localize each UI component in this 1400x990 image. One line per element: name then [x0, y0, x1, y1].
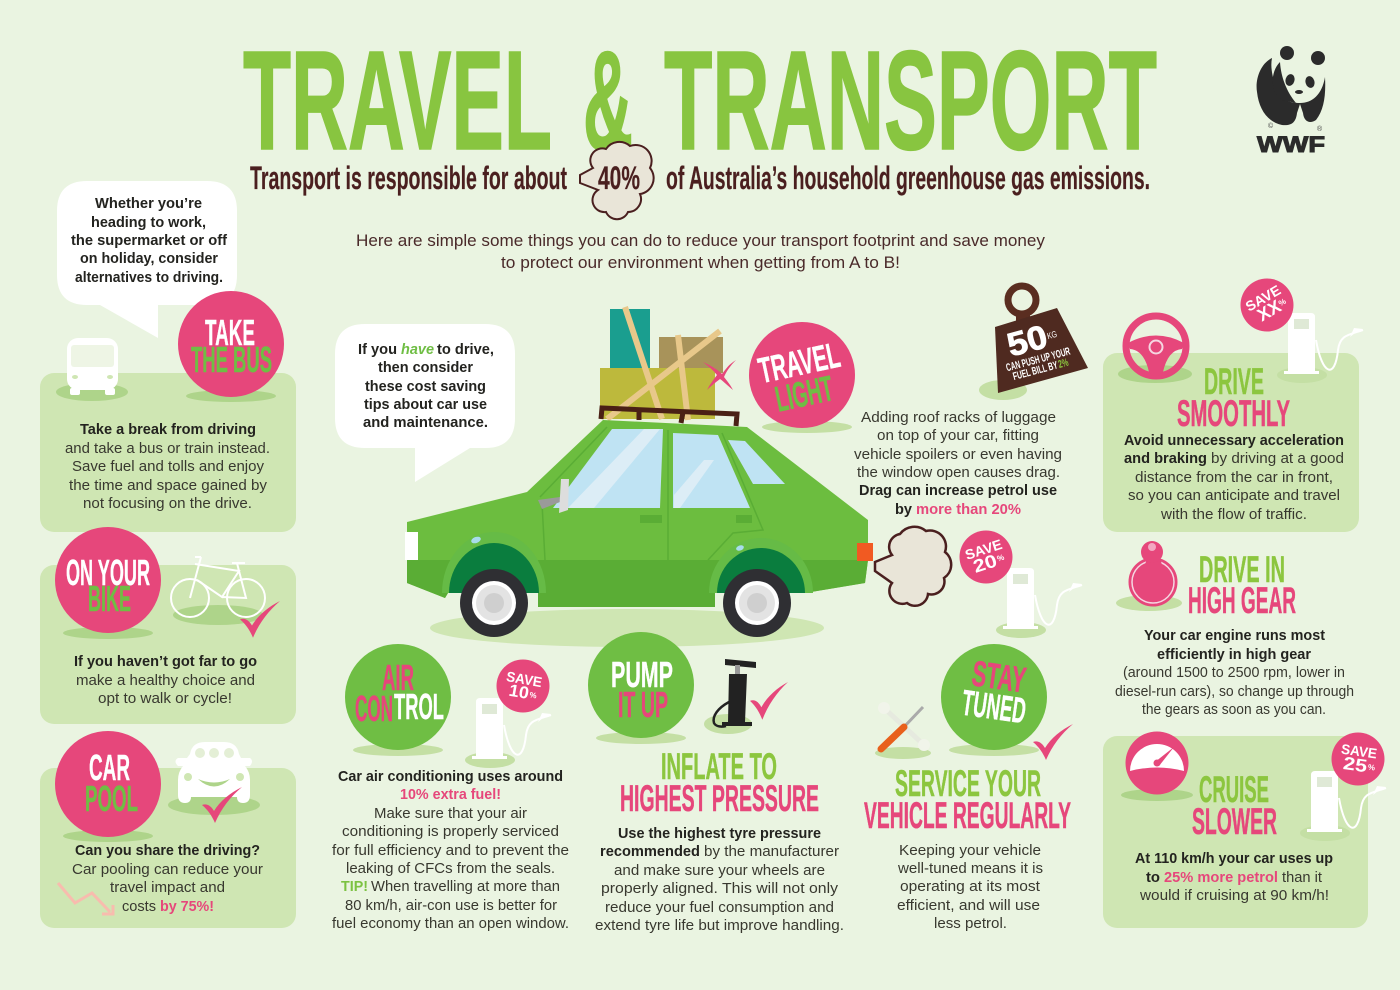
intro text: to protect our environment when getting from A to B! — [501, 254, 900, 272]
text: walk or cycle — [74, 653, 257, 707]
speech bubble: alternatives to driving: Whether you’re — [95, 195, 202, 212]
panel: cruise slower — [1103, 732, 1386, 928]
text: well-tuned vehicle — [897, 842, 1043, 932]
speech bubble: cost saving tips: to drive, — [437, 341, 494, 358]
icon: downward trend arrow — [58, 883, 113, 914]
text: share the driving: costs — [122, 898, 156, 915]
heading: inflate to highest pressure: INFLATE TO — [661, 746, 777, 787]
title: TRAVEL — [243, 21, 552, 179]
text: share the driving: Can you share the driving? — [75, 842, 260, 859]
heading: service your vehicle regularly — [864, 763, 1071, 836]
text: well-tuned vehicle: operating at its most — [900, 878, 1041, 895]
speech bubble: alternatives to driving: the supermarket or off — [71, 232, 228, 249]
icon: checkmark — [750, 682, 788, 720]
badge: on your bike — [55, 527, 161, 639]
icon: fuel pump save 20 percent: % — [996, 553, 1005, 563]
text: well-tuned vehicle: well-tuned means it is — [897, 860, 1043, 877]
text: take a break: Save fuel and tolls and enjoy — [72, 458, 264, 475]
icon: fuel pump save xx percent — [1240, 278, 1363, 383]
car body — [405, 420, 873, 607]
icon: fuel pump save 10 percent: % — [529, 690, 537, 700]
badge: take the bus: TAKE — [205, 312, 255, 353]
icon: 50 kg weight — [979, 286, 1088, 400]
icon: bus — [56, 338, 128, 401]
text: air conditioning: leaking of CFCs from the seals. — [346, 860, 555, 877]
heading: drive smoothly — [1177, 361, 1290, 434]
text: take a break: not focusing on the drive. — [83, 495, 252, 512]
text: 110 km/h: to — [1146, 869, 1160, 886]
icon: fuel pump save 25 percent: SAVE — [1340, 741, 1378, 762]
speech bubble: cost saving tips — [335, 324, 515, 482]
heading: drive in high gear: DRIVE IN — [1199, 549, 1285, 590]
icon: gear knob — [1116, 541, 1182, 611]
text: air conditioning: 10% extra fuel! — [400, 786, 501, 803]
intro text: Here are simple some things you can do to reduce your transport footprint and save money — [356, 232, 1046, 250]
text: avoid acceleration: and braking — [1124, 450, 1207, 467]
text: roof racks and drag: the window open causes drag. — [857, 464, 1060, 481]
text: 110 km/h: 25% more petrol — [1164, 869, 1278, 886]
badge: stay tuned: TUNED — [960, 682, 1029, 731]
text: share the driving: Car pooling can reduce your — [72, 861, 263, 878]
heading: inflate to highest pressure — [620, 746, 819, 819]
text: engine efficiency — [1115, 627, 1354, 718]
badge: pump it up: IT UP — [618, 684, 668, 725]
text: tyre pressure: properly aligned. This will not only — [601, 880, 839, 897]
speech bubble: cost saving tips: these cost saving — [365, 378, 486, 395]
subtitle: emissions statement: Transport is responsible for about — [250, 160, 567, 196]
text: engine efficiency: efficiently in high gear — [1157, 646, 1311, 663]
text: avoid acceleration: by driving at a good — [1211, 450, 1344, 467]
text: 110 km/h: would if cruising at 90 km/h! — [1139, 887, 1329, 904]
section: pump it up — [588, 632, 844, 934]
text: roof racks and drag: on top of your car, fitting — [877, 427, 1039, 444]
speech bubble: alternatives to driving: heading to work, — [91, 214, 206, 231]
text: roof racks and drag — [854, 409, 1062, 518]
badge: car pool — [55, 731, 161, 842]
text: avoid acceleration: Avoid unnecessary acceleration — [1124, 432, 1344, 449]
speech bubble: cost saving tips: If you — [358, 341, 397, 358]
icon: pink cross — [703, 360, 736, 390]
speech bubble: alternatives to driving: alternatives to driving. — [75, 269, 223, 286]
subtitle: emissions statement — [250, 142, 1150, 219]
badge: air control — [345, 644, 451, 756]
icon: steering wheel — [1118, 316, 1192, 383]
badge: air control: CON — [355, 688, 393, 729]
icon: 50 kg weight: KG — [1046, 329, 1058, 341]
icon: fuel pump save 25 percent — [1300, 732, 1386, 841]
icon: speedometer — [1121, 732, 1193, 801]
panel: take the bus — [40, 291, 296, 532]
text: well-tuned vehicle: efficient, and will use — [897, 897, 1040, 914]
icon: tyre pump — [704, 659, 756, 734]
text: roof racks and drag: Adding roof racks of luggage — [861, 409, 1056, 426]
text: air conditioning: Car air conditioning uses around — [338, 768, 563, 785]
subtitle: emissions statement: 40% — [598, 160, 640, 196]
heading: service your vehicle regularly: VEHICLE REGULARLY — [864, 795, 1071, 836]
text: roof racks and drag: more than 20% — [916, 501, 1021, 518]
icon: fuel pump save 10 percent — [465, 660, 551, 768]
badge: on your bike: ON YOUR — [66, 552, 150, 593]
heading: cruise slower: CRUISE — [1199, 769, 1269, 810]
section: stay tuned — [864, 644, 1073, 932]
text: share the driving — [72, 842, 263, 915]
icon: fuel pump save 20 percent: SAVE — [963, 536, 1004, 563]
WWF panda logo: WWF — [1257, 132, 1325, 157]
badge: travel light — [749, 322, 855, 433]
icon: 50 kg weight: FUEL BILL BY — [1012, 359, 1060, 383]
badge: air control: TROL — [394, 686, 444, 727]
text: tyre pressure: extend tyre life but improve handling. — [595, 917, 844, 934]
badge: take the bus: THE BUS — [191, 339, 272, 380]
text: avoid acceleration: distance from the car in front, — [1135, 469, 1333, 486]
speech bubble: alternatives to driving: on holiday, consider — [80, 250, 218, 267]
title — [243, 21, 1157, 179]
panel: drive smoothly — [1103, 278, 1363, 532]
icon: fuel pump save 10 percent: 10 — [507, 681, 530, 703]
badge: travel light: TRAVEL — [755, 334, 843, 391]
speech bubble: cost saving tips: have — [401, 341, 434, 358]
text: avoid acceleration: with the flow of traffic. — [1160, 506, 1307, 523]
icon: exhaust cloud — [875, 527, 951, 606]
speech bubble: cost saving tips: tips about car use — [364, 396, 487, 413]
icon: fuel pump save 20 percent — [960, 530, 1082, 638]
heading: cruise slower — [1192, 769, 1277, 842]
icon: 50 kg weight: 50 — [1003, 317, 1051, 364]
text: walk or cycle: opt to walk or cycle! — [98, 690, 232, 707]
icon: fuel pump save xx percent: XX — [1254, 296, 1285, 325]
text: avoid acceleration — [1124, 432, 1344, 523]
badge: stay tuned — [941, 644, 1047, 756]
icon: fuel pump save 10 percent: SAVE — [505, 668, 543, 690]
text: roof racks and drag: Drag can increase petrol use — [859, 482, 1057, 499]
text: share the driving: travel impact and — [110, 879, 225, 896]
badge: take the bus — [178, 291, 284, 402]
WWF panda logo — [1257, 46, 1325, 157]
badge: on your bike: BIKE — [88, 578, 131, 619]
speech bubble: alternatives to driving — [57, 181, 237, 338]
section: air control — [332, 644, 569, 932]
text: 110 km/h: At 110 km/h your car uses up — [1135, 850, 1333, 867]
ground shadow — [430, 609, 824, 647]
text: engine efficiency: Your car engine runs most — [1144, 627, 1325, 644]
badge: stay tuned: STAY — [969, 652, 1029, 701]
icon: 50 kg weight: CAN PUSH UP YOUR — [1005, 346, 1072, 374]
text: well-tuned vehicle: Keeping your vehicle — [899, 842, 1041, 859]
title: & — [583, 21, 633, 179]
text: roof racks and drag: vehicle spoilers or even having — [854, 446, 1062, 463]
icon: wrench and screwdriver — [875, 702, 931, 759]
icon: fuel pump save xx percent: % — [1277, 297, 1288, 308]
text: tyre pressure: Use the highest tyre pressure — [618, 825, 821, 842]
text: 110 km/h — [1135, 850, 1333, 904]
text: take a break — [65, 421, 270, 512]
text: tyre pressure: by the manufacturer — [704, 843, 839, 860]
text: air conditioning: for full efficiency and to prevent the — [332, 842, 569, 859]
heading: cruise slower: SLOWER — [1192, 801, 1277, 842]
text: roof racks and drag: by — [895, 501, 913, 518]
speech bubble: cost saving tips: then consider — [378, 359, 473, 376]
text: air conditioning: 80 km/h, air-con use is better for — [345, 897, 557, 914]
panel: car pool — [40, 731, 296, 928]
icon: fuel pump save 25 percent: 25 — [1342, 753, 1368, 776]
icon: car front with passengers — [168, 742, 260, 815]
icon: checkmark — [240, 601, 280, 638]
icon: fuel pump save xx percent: SAVE — [1243, 282, 1283, 314]
text: air conditioning: TIP! — [341, 878, 368, 895]
text: 110 km/h: than it — [1282, 869, 1323, 886]
heading: service your vehicle regularly: SERVICE YOUR — [895, 763, 1041, 804]
illustration: green car with roof luggage — [405, 307, 873, 647]
text: avoid acceleration: so you can anticipate and travel — [1128, 487, 1340, 504]
badge: car pool: CAR — [89, 747, 130, 788]
icon: fuel pump save 20 percent: 20 — [970, 550, 1000, 577]
heading: inflate to highest pressure: HIGHEST PRESSURE — [620, 778, 819, 819]
icon: 50 kg weight: 2% — [1057, 357, 1070, 371]
intro text — [356, 232, 1046, 272]
heading: drive smoothly: DRIVE — [1204, 361, 1264, 402]
text: well-tuned vehicle: less petrol. — [934, 915, 1007, 932]
text: air conditioning — [332, 768, 569, 932]
text: engine efficiency: the gears as soon as you can. — [1142, 701, 1326, 718]
text: air conditioning: fuel economy than an open window. — [332, 915, 569, 932]
text: engine efficiency: (around 1500 to 2500 rpm, lower in — [1123, 664, 1345, 681]
panel: on your bike — [40, 527, 296, 724]
text: tyre pressure: reduce your fuel consumption and — [605, 899, 834, 916]
heading: drive in high gear: HIGH GEAR — [1188, 580, 1296, 621]
WWF panda logo: © — [1268, 122, 1274, 130]
badge: car pool: POOL — [85, 778, 138, 819]
badge: air control: AIR — [382, 657, 414, 698]
badge: pump it up: PUMP — [611, 654, 673, 695]
text: air conditioning: Make sure that your air — [374, 805, 527, 822]
speech bubble: cost saving tips: and maintenance. — [363, 414, 488, 431]
luggage on roof — [600, 307, 737, 426]
badge: travel light: LIGHT — [771, 367, 837, 420]
text: tyre pressure — [595, 825, 844, 934]
text: tyre pressure: recommended — [600, 843, 700, 860]
icon: fuel pump save 25 percent: % — [1367, 763, 1376, 772]
text: share the driving: by 75%! — [160, 898, 214, 915]
icon: bicycle — [171, 557, 265, 625]
section: drive in high gear — [1115, 541, 1354, 718]
heading: drive in high gear — [1188, 549, 1296, 621]
text: air conditioning: conditioning is properly serviced — [342, 823, 559, 840]
WWF panda logo: ® — [1317, 125, 1323, 133]
icon: checkmark — [1033, 724, 1073, 760]
text: take a break: and take a bus or train instead. — [65, 440, 270, 457]
badge: pump it up — [588, 632, 694, 744]
text: engine efficiency: diesel-run cars), so change up through — [1115, 683, 1354, 700]
text: walk or cycle: If you haven’t got far to go — [74, 653, 257, 670]
heading: drive smoothly: SMOOTHLY — [1177, 393, 1290, 434]
front wheel — [442, 532, 546, 637]
text: take a break: the time and space gained by — [69, 477, 268, 494]
text: tyre pressure: and make sure your wheels are — [614, 862, 825, 879]
icon: checkmark — [202, 787, 242, 823]
text: air conditioning: When travelling at more than — [371, 878, 560, 895]
text: take a break: Take a break from driving — [80, 421, 256, 438]
text: walk or cycle: make a healthy choice and — [76, 672, 255, 689]
rear wheel — [709, 538, 813, 637]
